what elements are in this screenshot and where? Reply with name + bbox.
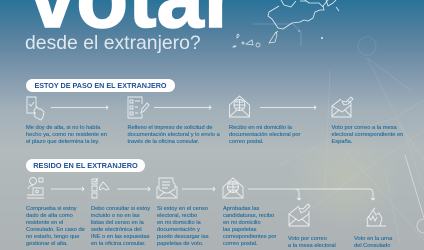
text: paso step 2: Relleno el impreso de solicitud de bbox=[128, 125, 213, 131]
text: paso step 1: Me doy de alta, si no lo había bbox=[26, 125, 100, 131]
text: resido vote by mail: a la mesa electoral bbox=[288, 242, 336, 248]
text: paso step 4: España. bbox=[332, 139, 352, 145]
text: resido vote by mail bbox=[288, 236, 336, 248]
text: paso step 4: electoral correspondiente en bbox=[332, 132, 403, 138]
text: resido step 1: Comprueba si estoy bbox=[26, 206, 77, 212]
text: resido step 4: las papeletas bbox=[223, 226, 257, 232]
text: resido step 3: papeletas de voto. bbox=[157, 240, 203, 246]
text: resido step 4: correo postal. bbox=[223, 240, 257, 246]
text: resido vote at urn: Voto en la urna bbox=[354, 236, 392, 242]
arrow bbox=[51, 187, 84, 191]
heading: estoy de paso bbox=[26, 79, 175, 92]
icon: ballot box hand bbox=[366, 208, 386, 226]
text: paso step 3: Recibo en mi domicilio la bbox=[229, 125, 292, 131]
text: paso step 3 bbox=[229, 125, 300, 145]
text: resido step 1: dado de alta como bbox=[26, 212, 73, 218]
text: resido step 1: residente en el bbox=[26, 220, 63, 226]
subtitle: desde el extranjero? bbox=[25, 32, 201, 54]
text: resido step 1: gestionar el alta. bbox=[26, 240, 68, 246]
arrow bbox=[182, 187, 215, 191]
text: resido step 2 bbox=[91, 206, 150, 246]
icon: envelope with globe bbox=[223, 178, 243, 198]
text: resido step 3: en mi domicilio la bbox=[157, 220, 201, 226]
text: resido step 2: sede electrónica del bbox=[91, 226, 142, 232]
text: resido step 3: Si estoy en el censo bbox=[157, 206, 208, 212]
text: resido step 3: documentación y bbox=[157, 226, 200, 232]
text: resido step 4 bbox=[223, 206, 276, 246]
text: paso step 2 bbox=[128, 125, 220, 145]
text: resido step 4: Aprobadas las bbox=[223, 206, 259, 212]
heading: estoy de paso: ESTOY DE PASO EN EL EXTRANJERO bbox=[34, 81, 167, 90]
text: paso step 2: través de la oficina consular. bbox=[128, 139, 199, 145]
heading: resido bbox=[26, 159, 145, 172]
text: resido vote at urn bbox=[354, 236, 392, 248]
arrow 3 bbox=[260, 106, 316, 110]
text: resido step 2: listas del censo en la bbox=[91, 220, 144, 226]
icon: person and laptop bbox=[27, 178, 44, 198]
text: resido step 2: en la oficina consular. bbox=[91, 240, 146, 246]
text: resido step 3: electoral, recibo bbox=[157, 212, 197, 218]
text: paso step 1: hecho ya, como no residente en bbox=[26, 132, 107, 138]
heading: resido: RESIDO EN EL EXTRANJERO bbox=[33, 161, 138, 170]
text: resido step 4: candidaturas, recibo bbox=[223, 212, 274, 218]
glow bbox=[290, 130, 400, 230]
icon: form and pen bbox=[128, 97, 149, 118]
panel: resido bbox=[26, 159, 392, 248]
text: paso step 1 bbox=[26, 125, 107, 145]
text: resido step 4: correspondientes por bbox=[223, 234, 276, 240]
text: resido step 3: puedo descargar las bbox=[157, 234, 209, 240]
icon: mail in envelope bbox=[332, 97, 353, 117]
text: resido step 4: en mi domicilio bbox=[223, 220, 261, 226]
text: resido step 2: incluido o no en las bbox=[91, 212, 140, 218]
branching arrow bbox=[248, 189, 375, 200]
text: paso step 4: Voto por correo a la mesa bbox=[332, 125, 397, 131]
icon: envelope with letter bbox=[157, 178, 177, 198]
text: resido step 3 bbox=[157, 206, 209, 246]
icon: checklist and hand bbox=[92, 178, 109, 198]
arrow 2 bbox=[154, 106, 211, 110]
icon: phone with hand bbox=[27, 97, 44, 120]
text: resido vote by mail: Voto por correo bbox=[288, 236, 327, 242]
text: resido step 1: Consulado. En caso de bbox=[26, 226, 85, 232]
text: paso step 4 bbox=[332, 125, 403, 145]
panel: estoy de paso bbox=[26, 79, 403, 145]
text: resido step 1 bbox=[26, 206, 85, 246]
text: paso step 2: documentación electoral y lo envío a bbox=[128, 132, 220, 138]
arrow 1 bbox=[51, 106, 108, 110]
text: paso step 3: correo postal. bbox=[229, 139, 263, 145]
text: paso step 1: el plazo que determina la ley. bbox=[26, 139, 100, 145]
icon: mail in envelope bbox=[289, 204, 310, 226]
text: resido vote at urn: del Consulado bbox=[354, 242, 390, 248]
text: paso step 3: documentación electoral por bbox=[229, 132, 300, 138]
text: resido step 2: INE o en las expuestas bbox=[91, 234, 150, 240]
arrow bbox=[117, 187, 150, 191]
icon: envelope with globe bbox=[230, 96, 250, 117]
text: resido step 1: no estarlo, tengo que bbox=[26, 234, 79, 240]
text: resido step 2: Debo consultar si estoy bbox=[91, 206, 150, 212]
